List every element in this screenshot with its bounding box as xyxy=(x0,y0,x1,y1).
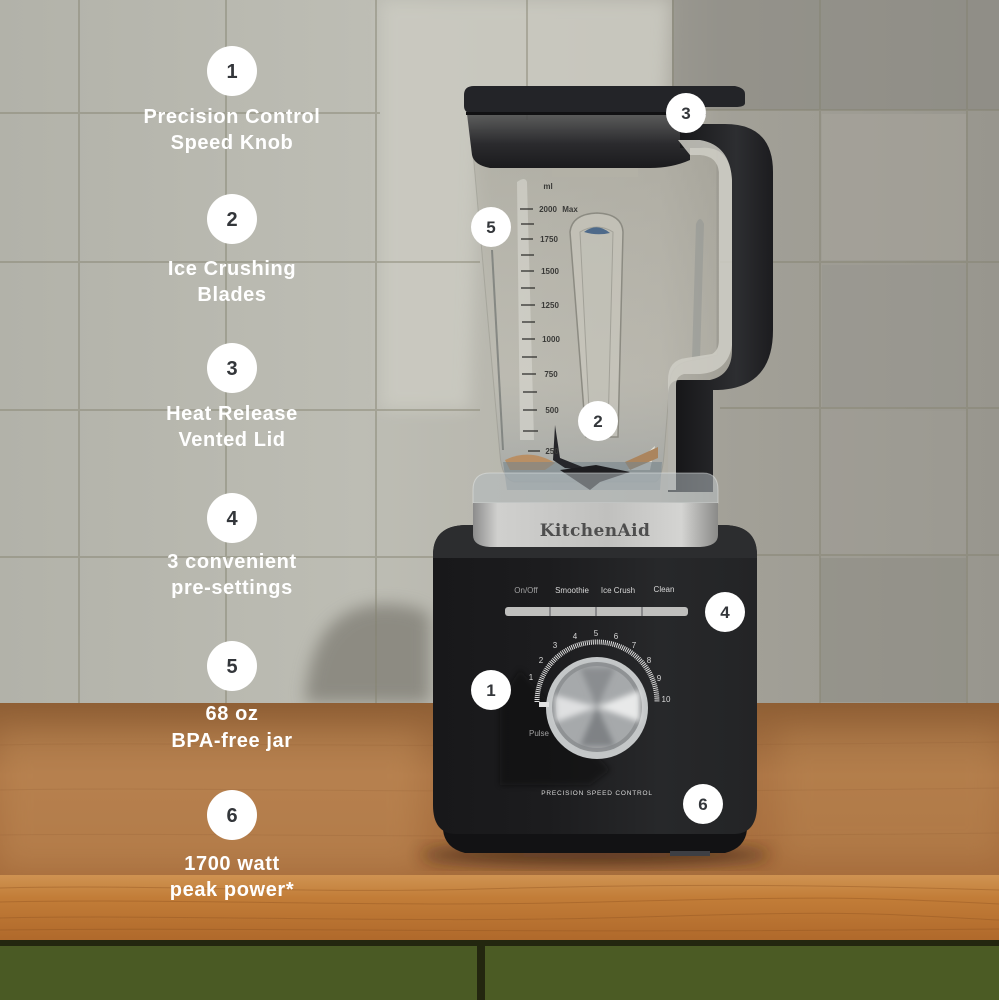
jar measurement scale: 2000 xyxy=(539,205,557,214)
feature 5: 5 xyxy=(226,656,238,678)
silver collar with logo: KitchenAid xyxy=(540,521,650,541)
speed dial numbers: 8 xyxy=(647,656,652,665)
speed dial numbers: 9 xyxy=(657,674,662,683)
jar measurement scale: 750 xyxy=(544,370,558,379)
preset labels: Clean xyxy=(654,585,674,594)
speed dial numbers: 10 xyxy=(662,695,671,704)
marker 2: 2 xyxy=(593,412,603,431)
feature 4 xyxy=(167,493,297,599)
feature 2: Blades xyxy=(197,284,267,306)
blender xyxy=(420,86,773,865)
feature 4: pre-settings xyxy=(171,577,293,599)
marker 6 xyxy=(683,784,723,824)
feature 1: Speed Knob xyxy=(171,132,293,154)
speed dial numbers: 6 xyxy=(614,632,619,641)
feature 6: peak power* xyxy=(170,879,294,901)
feature 3: Vented Lid xyxy=(178,429,286,451)
marker 1: 1 xyxy=(486,681,496,700)
jar measurement scale: 250 xyxy=(545,447,559,456)
control panel xyxy=(500,585,688,797)
feature 6: 6 xyxy=(226,805,238,827)
feature 3 xyxy=(166,343,298,451)
marker 4 xyxy=(705,592,745,632)
jar measurement scale: ml xyxy=(543,182,553,191)
background: tiled wall xyxy=(0,0,999,705)
handle clear inner sleeve xyxy=(668,140,732,490)
feature 3: Heat Release xyxy=(166,403,298,425)
speed dial numbers: 4 xyxy=(573,632,578,641)
marker 3: 3 xyxy=(681,104,691,123)
speed dial numbers: 3 xyxy=(553,641,558,650)
feature 1: 1 xyxy=(226,61,238,83)
jar measurement scale: 1250 xyxy=(541,301,559,310)
marker 4: 4 xyxy=(720,603,730,622)
feature 6: 1700 watt xyxy=(184,853,280,875)
wooden counter xyxy=(0,703,999,940)
jar body xyxy=(471,130,717,490)
speed knob xyxy=(539,657,648,759)
preset labels: Smoothie xyxy=(555,586,589,595)
preset labels xyxy=(514,585,674,595)
jar measurement scale xyxy=(520,182,578,456)
silver collar with logo xyxy=(473,503,718,547)
marker 6: 6 xyxy=(698,795,708,814)
marker 2 xyxy=(578,401,618,441)
feature 5: 68 oz xyxy=(205,703,259,725)
feature 2: 2 xyxy=(226,209,238,231)
speed dial numbers: 1 xyxy=(529,673,534,682)
blender callout markers xyxy=(471,93,745,824)
feature 4: 3 convenient xyxy=(167,551,297,573)
speed dial numbers: 5 xyxy=(594,629,599,638)
feature 5 xyxy=(171,641,293,752)
preset labels: On/Off xyxy=(514,586,538,595)
preset button strip xyxy=(505,607,688,616)
jar handle xyxy=(668,124,773,492)
feature list xyxy=(144,46,320,901)
knob shadow xyxy=(500,670,610,785)
feature 6 xyxy=(170,790,294,901)
feature 1: Precision Control xyxy=(144,106,320,128)
jar measurement scale: Max xyxy=(562,205,578,214)
feature 3: 3 xyxy=(226,358,238,380)
speed dial tick arc xyxy=(537,642,657,702)
marker 3 xyxy=(666,93,706,133)
feature 2 xyxy=(168,194,296,306)
jar lid xyxy=(464,86,745,177)
jar measurement scale: 500 xyxy=(545,406,559,415)
motor base xyxy=(433,525,757,856)
green cabinet doors xyxy=(0,940,999,1000)
clear jar base xyxy=(473,473,718,503)
speed dial numbers: 7 xyxy=(632,641,637,650)
speed dial numbers: Pulse xyxy=(529,729,550,738)
speed dial numbers: 2 xyxy=(539,656,544,665)
feature 4: 4 xyxy=(226,508,238,530)
jar measurement scale: 1000 xyxy=(542,335,560,344)
feature 1 xyxy=(144,46,320,154)
feature 5: BPA-free jar xyxy=(171,730,293,752)
jar centre column xyxy=(570,213,623,437)
preset labels: Ice Crush xyxy=(601,586,635,595)
feature 2: Ice Crushing xyxy=(168,258,296,280)
model caption: PRECISION SPEED CONTROL xyxy=(541,790,653,797)
speed dial numbers xyxy=(529,629,671,738)
marker 1 xyxy=(471,670,511,710)
marker 5: 5 xyxy=(486,218,496,237)
jar measurement scale: 1750 xyxy=(540,235,558,244)
jar blades xyxy=(503,425,662,490)
blender cast shadow on counter xyxy=(420,845,770,865)
marker 5 xyxy=(471,207,511,247)
jar measurement scale: 1500 xyxy=(541,267,559,276)
